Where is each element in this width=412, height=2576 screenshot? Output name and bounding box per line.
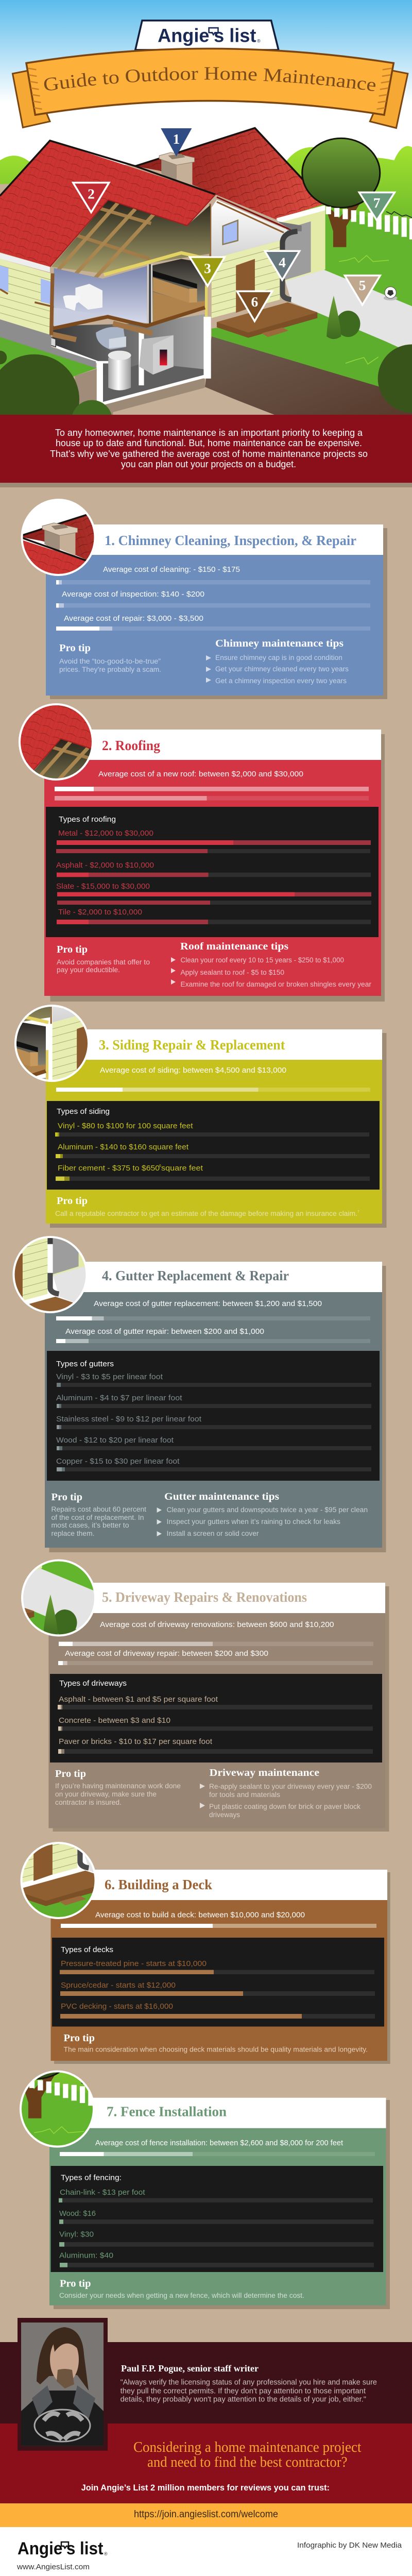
cost bars: Average cost of cleaning: - $150 - $175 xyxy=(103,565,240,574)
cost bars: Average cost of repair: $3,000 - $3,500 xyxy=(64,614,203,623)
types of siding xyxy=(47,1101,380,1190)
cost bars: Average cost of gutter replacement: between $1,200 and $1,500 xyxy=(94,1299,322,1308)
pro tip: replace them. xyxy=(52,1530,95,1537)
intro band xyxy=(0,415,412,487)
types of fencing: Vinyl: $30 xyxy=(59,2230,94,2239)
pro tip xyxy=(59,642,161,673)
expert quote band: "Always verify the licensing status of any professional you hire and make sure xyxy=(121,2378,377,2387)
pro tip: Repairs cost about 60 percent xyxy=(52,1505,146,1513)
types of decks: Types of decks xyxy=(61,1945,113,1954)
logo tab: ® xyxy=(257,39,261,44)
pro tip: Pro tip xyxy=(59,642,91,654)
marker 7 xyxy=(359,192,394,221)
panel: 1 chimney xyxy=(21,499,387,699)
types of siding: 6 xyxy=(159,1164,161,1168)
pro tip: Pro tip xyxy=(64,2032,95,2044)
types of siding: square feet xyxy=(161,1164,203,1173)
cost bar: Average cost of fence installation: between $2,600 and $8,000 for 200 feet xyxy=(95,2139,344,2147)
pro tip: on your driveway, make sure the xyxy=(55,1790,157,1798)
types of fencing: Aluminum: $40 xyxy=(59,2251,113,2260)
intro band: you can plan out your projects on a budget. xyxy=(121,459,296,469)
pro tip: Pro tip xyxy=(57,944,88,955)
pro tip: prices. They’re probably a scam. xyxy=(59,666,161,673)
cost bars: Average cost of driveway repair: between $200 and $300 xyxy=(65,1649,268,1658)
maintenance tips: Re-apply sealant to your driveway every year - $200 xyxy=(209,1783,372,1790)
cost bar xyxy=(61,1910,376,1928)
bathroom xyxy=(54,264,152,327)
heading: 3. Siding Repair & Replacement xyxy=(99,1037,285,1053)
call to action band: Join Angie’s List 2 million members for reviews you can trust: xyxy=(81,2483,330,2493)
types of fencing: Types of fencing: xyxy=(61,2174,122,2182)
types of driveways xyxy=(50,1674,382,1762)
maintenance tips xyxy=(157,1491,368,1537)
marker 1: 1 xyxy=(173,131,180,147)
icon: gutter vignette xyxy=(12,1236,85,1313)
maintenance tips: Get your chimney cleaned every two years xyxy=(215,665,349,673)
cost bars: Average cost of driveway renovations: between $600 and $10,200 xyxy=(100,1620,334,1629)
maintenance tips: Clean your roof every 10 to 15 years - $250 to $1,000 xyxy=(180,956,344,964)
photo: author portrait xyxy=(18,2318,108,2451)
pro tip xyxy=(57,944,150,974)
right wing xyxy=(276,207,325,281)
cost bar xyxy=(56,1066,370,1092)
pro tip: most cases, it’s better to xyxy=(52,1521,129,1529)
call to action band: and need to find the best contractor? xyxy=(147,2454,347,2470)
expert quote band: Paul F.P. Pogue, senior staff writer xyxy=(121,2363,259,2374)
icon: deck vignette xyxy=(21,1842,95,1919)
pro tip xyxy=(55,1195,359,1217)
pro tip: contractor is insured. xyxy=(55,1799,122,1806)
icon: fence vignette xyxy=(20,2070,93,2147)
heading: 4. Gutter Replacement & Repair xyxy=(102,1268,289,1283)
types of siding: Types of siding xyxy=(57,1107,110,1116)
fence xyxy=(329,207,412,240)
types of driveways: Types of driveways xyxy=(59,1679,127,1688)
title banner xyxy=(11,47,409,129)
maintenance tips: Put plastic coating down for brick or paver block xyxy=(209,1803,360,1810)
maintenance tips: Examine the roof for damaged or broken shingles every year xyxy=(180,980,372,988)
pro tip: pay your deductible. xyxy=(57,966,120,974)
maintenance tips: Driveway maintenance xyxy=(210,1767,319,1778)
types of roofing: Tile - $2,000 to $10,000 xyxy=(58,908,142,917)
panel: 5 driveway xyxy=(21,1559,389,1832)
grass tufts xyxy=(339,256,389,364)
pro tip: Pro tip xyxy=(60,2278,91,2290)
maintenance tips: Chimney maintenance tips xyxy=(215,638,344,649)
title banner: Guide to Outdoor Home Maintenance xyxy=(44,67,375,91)
intro band: house up to date and functional. But, home maintenance can be expensive. xyxy=(56,438,362,448)
panel: 6 deck xyxy=(21,1842,390,2064)
expert quote band: details, they probably won't pay attention to the details of your job, either." xyxy=(121,2395,366,2404)
back roof xyxy=(135,128,325,219)
pro tip: The main consideration when choosing deck materials should be quality materials and longevity. xyxy=(64,2045,368,2054)
url band: https://join.angieslist.com/welcome xyxy=(134,2509,278,2520)
expert quote band: they pull the correct permits. If they don't pay attention to those important xyxy=(121,2387,366,2396)
cost bars xyxy=(56,565,370,631)
maintenance tips: Roof maintenance tips xyxy=(180,941,288,952)
icon: siding vignette xyxy=(14,1005,88,1082)
types of fencing: Wood: $16 xyxy=(59,2209,96,2218)
types of roofing: Metal - $12,000 to $30,000 xyxy=(58,829,153,838)
types of driveways: Concrete - between $3 and $10 xyxy=(59,1716,170,1725)
sky xyxy=(0,0,412,165)
pro tip xyxy=(64,2032,368,2054)
marker 7: 7 xyxy=(373,195,381,211)
foreground bushes xyxy=(0,344,412,415)
types of siding: Fiber cement - $375 to $650 xyxy=(58,1164,160,1173)
pro tip: of the cost of replacement. In xyxy=(52,1514,144,1521)
types of fencing: Chain-link - $13 per foot xyxy=(60,2188,145,2197)
gable wall and siding xyxy=(212,200,288,259)
maintenance tips: Ensure chimney cap is in good condition xyxy=(215,654,342,662)
types of roofing xyxy=(46,807,379,937)
marker 2: 2 xyxy=(88,186,95,202)
pro tip xyxy=(52,1492,146,1537)
pro tip: Pro tip xyxy=(55,1768,86,1780)
logo: Angie's list xyxy=(18,2539,103,2558)
cost bars: Average cost of a new roof: between $2,000 and $30,000 xyxy=(98,770,303,778)
maintenance tips xyxy=(171,941,372,988)
gutter and downspout xyxy=(277,222,302,300)
maintenance tips: Apply sealant to roof - $5 to $150 xyxy=(180,969,284,976)
pro tip xyxy=(55,1768,181,1806)
maintenance tips: Clean your gutters and downspouts twice a year - $95 per clean xyxy=(167,1506,368,1514)
types of decks: Spruce/cedar - starts at $12,000 xyxy=(61,1981,176,1990)
types of decks xyxy=(52,1938,384,2027)
marker 3: 3 xyxy=(204,260,211,276)
marker 6 xyxy=(237,291,272,321)
map markers xyxy=(73,128,394,321)
types of gutters: Aluminum - $4 to $7 per linear foot xyxy=(56,1394,182,1402)
url band xyxy=(0,2503,412,2527)
credit: Infographic by DK New Media xyxy=(297,2541,402,2550)
front roof xyxy=(0,141,215,273)
cost bar: Average cost of siding: between $4,500 and $13,000 xyxy=(100,1066,286,1075)
icon: roof vignette xyxy=(19,703,92,781)
maintenance tips: for tools and materials xyxy=(209,1791,280,1799)
soccer ball xyxy=(384,287,397,300)
heading: 2. Roofing xyxy=(102,738,160,753)
maintenance tips: Gutter maintenance tips xyxy=(164,1491,279,1502)
call to action band: Considering a home maintenance project xyxy=(133,2439,362,2455)
pro tip: Call a reputable contractor to get an estimate of the damage before making an insurance claim. xyxy=(55,1210,357,1217)
panel: 2 roofing xyxy=(19,703,385,1002)
footer xyxy=(0,2527,412,2576)
chimney xyxy=(159,152,195,185)
maintenance tips xyxy=(206,638,349,685)
kitchen xyxy=(152,259,205,324)
types of decks: PVC decking - starts at $16,000 xyxy=(61,2002,173,2011)
maintenance tips: Install a screen or solid cover xyxy=(167,1530,259,1537)
maintenance tips: Get a chimney inspection every two years xyxy=(215,677,347,685)
attic and rafters xyxy=(51,200,210,284)
pro tip: If you’re having maintenance work done xyxy=(55,1782,181,1790)
types of roofing: Asphalt - $2,000 to $10,000 xyxy=(56,861,154,870)
types of gutters: Copper - $15 to $30 per linear foot xyxy=(56,1457,180,1466)
logo tab: Angie's list xyxy=(158,25,256,46)
types of gutters: Wood - $12 to $20 per linear foot xyxy=(56,1436,174,1445)
call to action band xyxy=(0,2424,412,2503)
types of gutters xyxy=(47,1351,380,1481)
types of fencing xyxy=(50,2166,383,2272)
insulation and floor beams xyxy=(204,286,209,317)
pro tip: Pro tip xyxy=(57,1195,88,1207)
panel: 4 gutters xyxy=(12,1236,386,1552)
types of gutters: Types of gutters xyxy=(56,1360,114,1368)
types of gutters: Stainless steel - $9 to $12 per linear foot xyxy=(56,1415,202,1423)
panel: 3 siding xyxy=(14,1005,386,1228)
left siding xyxy=(0,259,51,335)
marker 5: 5 xyxy=(359,277,366,293)
cost bar: Average cost to build a deck: between $10,000 and $20,000 xyxy=(95,1910,305,1920)
pro tip xyxy=(59,2278,304,2299)
pro tip: 7 xyxy=(357,1210,359,1214)
cost bars xyxy=(58,1620,373,1665)
marker 2 xyxy=(73,183,109,212)
types of siding: Aluminum - $140 to $160 square feet xyxy=(58,1143,189,1151)
illustration: cutaway house and yard xyxy=(0,128,412,445)
icon: driveway vignette xyxy=(21,1559,94,1636)
marker 6: 6 xyxy=(251,294,258,310)
cost bars: Average cost of inspection: $140 - $200 xyxy=(62,590,204,599)
panel: 7 fence xyxy=(20,2070,390,2309)
marker 3 xyxy=(190,257,225,286)
logo: ® xyxy=(104,2551,108,2556)
types of driveways: Asphalt - between $1 and $5 per square foot xyxy=(59,1695,218,1704)
marker 4 xyxy=(265,251,300,280)
maintenance tips: driveways xyxy=(209,1811,240,1819)
expert quote band xyxy=(0,2342,412,2424)
tree xyxy=(302,138,380,247)
heading: 1. Chimney Cleaning, Inspection, & Repair xyxy=(105,533,356,548)
pro tip: Pro tip xyxy=(52,1492,82,1503)
website: www.AngiesList.com xyxy=(16,2563,90,2571)
cost bar xyxy=(60,2139,375,2156)
deck xyxy=(217,302,317,338)
heading: 7. Fence Installation xyxy=(107,2104,227,2120)
pro tip: Avoid companies that offer to xyxy=(57,958,150,966)
shrubs xyxy=(327,296,360,339)
types of roofing: Types of roofing xyxy=(59,815,116,824)
maintenance tips: Inspect your gutters when it’s raining to check for leaks xyxy=(167,1518,340,1526)
intro band: That’s why we’ve gathered the average cost of home maintenance projects so xyxy=(50,449,368,459)
pro tip: Avoid the “too-good-to-be-true” xyxy=(59,657,161,665)
heading: 6. Building a Deck xyxy=(105,1877,212,1892)
heading: 5. Driveway Repairs & Renovations xyxy=(102,1589,307,1605)
cost bars: Average cost of gutter repair: between $200 and $1,000 xyxy=(65,1327,264,1336)
marker 1 xyxy=(161,128,192,157)
cost bars xyxy=(56,1299,370,1343)
cost bars xyxy=(55,770,369,801)
logo tab xyxy=(135,21,279,50)
pro tip: Consider your needs when getting a new fence, which will determine the cost. xyxy=(59,2292,304,2299)
basement xyxy=(37,314,211,403)
marker 4: 4 xyxy=(279,254,286,270)
icon: chimney vignette xyxy=(21,499,94,576)
maintenance tips xyxy=(200,1767,372,1819)
types of driveways: Paver or bricks - $10 to $17 per square foot xyxy=(59,1737,213,1746)
types of roofing: Slate - $15,000 to $30,000 xyxy=(56,882,150,891)
types of decks: Pressure-treated pine - starts at $10,000 xyxy=(61,1959,207,1968)
marker 5 xyxy=(345,276,380,305)
types of gutters: Vinyl - $3 to $5 per linear foot xyxy=(56,1372,163,1381)
types of siding: Vinyl - $80 to $100 for 100 square feet xyxy=(58,1122,193,1130)
intro band: To any homeowner, home maintenance is an important priority to keeping a xyxy=(55,428,363,438)
